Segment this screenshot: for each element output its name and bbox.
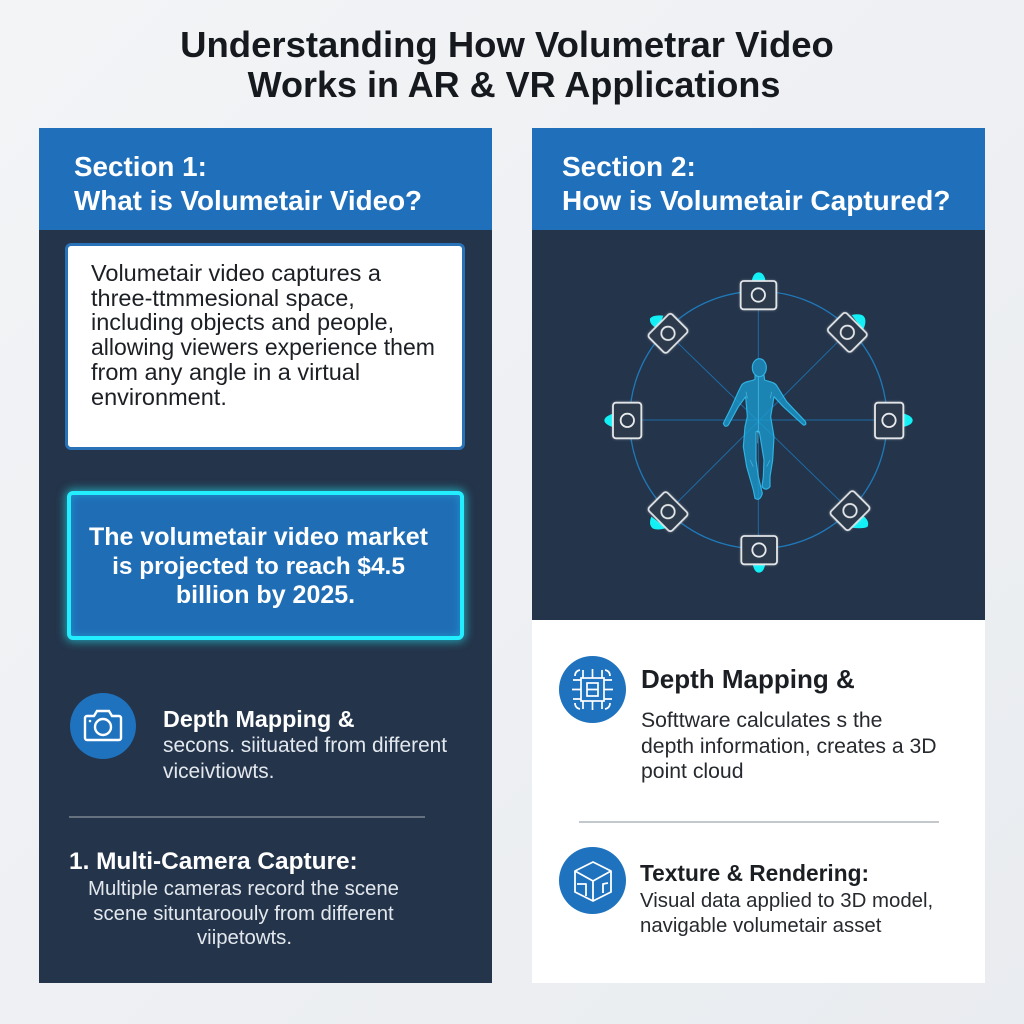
market stat text: billion by 2025.: [176, 581, 355, 609]
human figure: [723, 359, 806, 499]
panel: section 1: [39, 128, 492, 983]
icon: camera: [70, 693, 136, 759]
multi-camera description: [88, 878, 399, 949]
camera: bottom: [741, 536, 777, 564]
depth mapping step description: [641, 709, 937, 783]
capture diagram background: [532, 230, 985, 620]
cyan lights: [604, 272, 913, 573]
depth mapping step description: Softtware calculates s the: [641, 709, 882, 732]
divider: left panel: [69, 816, 425, 818]
multi-camera description: viipetowts.: [197, 927, 292, 949]
depth mapping step description: depth information, creates a 3D: [641, 734, 937, 758]
camera: top left: [647, 313, 689, 354]
title: [180, 24, 834, 105]
icon: textured cube: [559, 847, 626, 914]
section 1 heading: Section 1:: [74, 151, 207, 182]
definition text: allowing viewers experience them: [91, 334, 435, 360]
depth mapping description: viceivtiowts.: [163, 760, 274, 782]
depth mapping description: secons. siituated from different: [163, 734, 447, 757]
texture step description: Visual data applied to 3D model,: [640, 890, 933, 912]
camera ring and sight lines: [627, 291, 889, 549]
texture step heading: Texture & Rendering:: [640, 860, 869, 886]
camera: top: [741, 281, 776, 309]
capture rig diagram: [604, 272, 913, 573]
definition text: environment.: [91, 384, 227, 410]
camera: right: [875, 403, 903, 438]
texture step description: navigable volumetair asset: [640, 915, 881, 937]
camera: left: [613, 403, 641, 438]
section 2 heading: How is Volumetair Captured?: [562, 185, 950, 216]
panel: section 2: [532, 128, 985, 983]
market stat text: [89, 523, 428, 609]
definition text: from any angle in a virtual: [91, 359, 360, 385]
depth mapping step heading: Depth Mapping &: [641, 664, 855, 694]
depth mapping item: [163, 706, 447, 782]
section 2 heading: [562, 151, 950, 216]
divider: right panel: [579, 821, 939, 822]
definition text: Volumetair video captures a: [91, 260, 381, 286]
multi-camera description: scene situntaroouly from different: [93, 902, 394, 924]
texture and rendering step: [640, 860, 933, 937]
section 1 header: [39, 128, 492, 230]
section 1 heading: [74, 151, 422, 216]
title: Works in AR & VR Applications: [248, 64, 780, 105]
multi-camera heading: 1. Multi-Camera Capture:: [69, 848, 358, 875]
definition text: three-ttmmesional space,: [91, 285, 355, 311]
section 1 heading: What is Volumetair Video?: [74, 185, 422, 216]
depth mapping step: [641, 664, 937, 783]
texture step description: [640, 890, 933, 937]
depth mapping step description: point cloud: [641, 760, 743, 783]
depth mapping heading: Depth Mapping &: [163, 706, 355, 732]
definition card: [65, 243, 465, 450]
market stat text: is projected to reach $4.5: [112, 553, 405, 580]
section 2 header: [532, 128, 985, 230]
multi-camera capture item: [69, 848, 399, 949]
title: Understanding How Volumetrar Video: [180, 24, 834, 65]
camera: bottom left: [647, 491, 689, 532]
icon: depth mapping chip: [559, 656, 626, 723]
camera: top right: [827, 312, 868, 353]
definition text: [91, 260, 435, 410]
multi-camera description: Multiple cameras record the scene: [88, 878, 399, 900]
depth mapping description: [163, 734, 447, 782]
market stat text: The volumetair video market: [89, 523, 428, 551]
market stat callout: [67, 491, 464, 640]
definition text: including objects and people,: [91, 309, 394, 335]
section 2 heading: Section 2:: [562, 151, 696, 182]
camera: bottom right: [829, 490, 871, 531]
